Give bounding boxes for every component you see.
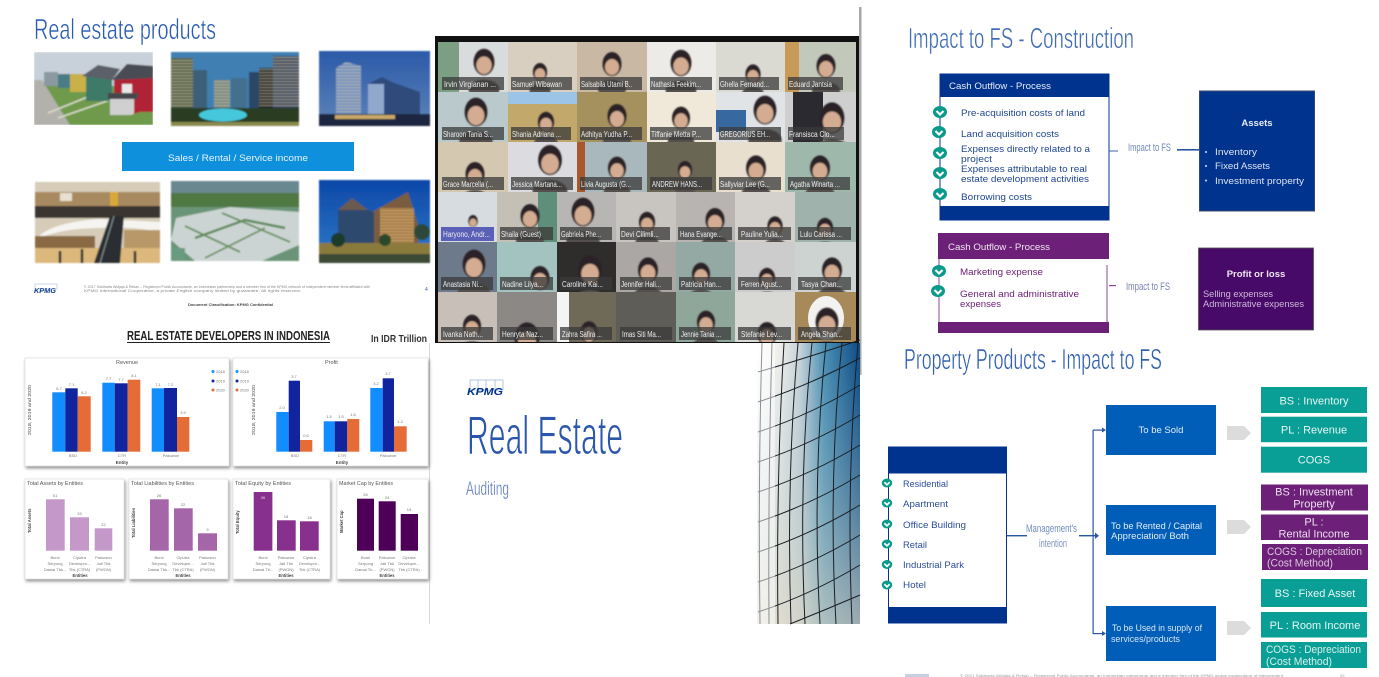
chart: market cap by entities: 26 — [363, 492, 368, 497]
chart: total liabilities by entities: Developm... — [172, 561, 194, 566]
chart: total liabilities by entities: 9 — [206, 527, 209, 532]
results: used: BS : Fixed Asset — [1275, 588, 1355, 600]
chart: total liabilities by entities: Pakuwon — [199, 555, 216, 560]
tile backgrounds row 6 — [438, 292, 856, 342]
arrow: used result — [1227, 621, 1251, 635]
chart: market cap by entities: 19 — [407, 507, 412, 512]
chart: profit: Entity — [336, 460, 349, 465]
box: assets — [1200, 91, 1314, 211]
chart: total equity by entities: Pakuwon — [278, 555, 294, 560]
card: property types list — [882, 447, 1007, 623]
participant names: Nathasia Feekim... — [651, 80, 701, 89]
chart: total equity by entities: Entities — [278, 573, 294, 578]
participant names: ANDREW HANS... — [652, 180, 702, 189]
chart: total assets by entities: 51 — [53, 493, 58, 498]
participant names: Angela Shan... — [801, 330, 842, 339]
card: cash outflow process blue: Expenses directly related to a — [961, 144, 1091, 155]
chart: revenue: 2018 — [216, 369, 226, 374]
participant names: Hana Evange... — [680, 230, 722, 239]
results: used: COGS : Depreciation — [1266, 644, 1361, 656]
chart: revenue: 7.7 — [118, 377, 125, 382]
chart: revenue: 6.2 — [81, 390, 88, 395]
box: to be rented: To be Rented / Capital — [1111, 521, 1202, 532]
participant names: Fransisca Clo... — [789, 130, 835, 139]
participant names: Nadine Lilya... — [502, 280, 543, 289]
results: rented: PL : — [1304, 516, 1324, 528]
participant names: Agatha Winarta ... — [790, 180, 840, 189]
box: assets: Investment property — [1215, 176, 1304, 187]
panel: real estate products slide — [34, 14, 430, 307]
chart: total assets by entities: Pakuwon — [95, 555, 112, 560]
participant names: Stefanie Lev... — [741, 330, 782, 339]
card: cash outflow process purple: expenses — [960, 299, 1001, 310]
chart: revenue: 7.1 — [155, 382, 162, 387]
photo: residential houses — [34, 52, 153, 125]
chart: profit: 1.5 — [326, 414, 333, 419]
results: sold: PL : Revenue — [1281, 424, 1347, 436]
chart: total equity by entities: Tbk (CTRA) — [299, 567, 321, 572]
participant names: Jennie Tania ... — [681, 330, 721, 339]
results: used: PL : Room Income — [1270, 620, 1360, 632]
tile backgrounds row 2 — [438, 92, 856, 142]
chart: total liabilities by entities: Damai Tbk... — [148, 567, 170, 572]
chart: market cap by entities: 24 — [385, 495, 390, 500]
card: cash outflow process blue: Land acquisition costs — [961, 129, 1059, 140]
card: property types list: Retail — [903, 540, 927, 551]
chart: total assets by entities: Serpong — [47, 561, 63, 566]
photo: retail mall — [35, 182, 160, 263]
banner: sales rental service income — [122, 142, 354, 171]
photo: industrial park — [171, 181, 299, 261]
box: profit or loss: Selling expenses — [1203, 289, 1273, 300]
participant names: Pauline Yulia... — [741, 230, 783, 239]
tile backgrounds row 5 — [438, 242, 856, 292]
chart: total assets by entities: 33 — [77, 511, 82, 516]
photo: apartment towers — [171, 52, 299, 126]
participant names: Haryono, Andr... — [443, 230, 490, 239]
participant heads row 5 — [457, 248, 846, 292]
chart: profit — [233, 358, 428, 466]
chart: total equity by entities: Ciputra — [303, 555, 317, 560]
results: sold: BS : Inventory — [1279, 396, 1349, 408]
participant names: Ferren Agust... — [741, 280, 782, 289]
results: sold: COGS — [1298, 454, 1330, 466]
chart: revenue: 2018, 2019 and 2020 — [27, 384, 32, 435]
panel: KPMG real estate cover slide — [466, 340, 860, 624]
chart: total liabilities by entities: 26 — [157, 493, 162, 498]
participant names: Sharoon Tania S... — [443, 130, 493, 139]
box: to be sold: To be Sold — [1139, 425, 1183, 436]
results: rented: COGS : Depreciation — [1267, 546, 1362, 558]
chart: revenue: 8.1 — [131, 373, 138, 378]
card: cash outflow process blue: Pre-acquisition costs of land — [961, 108, 1085, 119]
label: management's intention: Management's — [1026, 523, 1077, 535]
chart: market cap by entities: Market Cap by Entities — [339, 481, 393, 487]
photo: office buildings — [319, 51, 430, 126]
card: cash outflow process blue: estate development activities — [961, 174, 1089, 185]
panel: video call participant grid — [435, 36, 859, 343]
participant names: Ghella Fernand... — [720, 80, 769, 89]
chart: total equity by entities: 18 — [307, 515, 312, 520]
chart: total assets by entities: 22 — [101, 522, 106, 527]
title: real estate: Real Estate — [467, 404, 623, 466]
chart: total equity by entities: Total Equity by Entities — [235, 481, 291, 487]
chart: total liabilities by entities: Ciputra — [177, 555, 190, 560]
chart: total liabilities by entities: Entities — [175, 573, 191, 578]
results: rented — [1261, 484, 1368, 570]
card: cash outflow process blue: project — [961, 154, 992, 165]
box: profit or loss — [1198, 248, 1314, 330]
participant names: Shania Adriana ... — [512, 130, 561, 139]
participant names: Shaila (Guest) — [501, 230, 541, 239]
chart: profit: 3.2 — [373, 381, 380, 386]
results: rented: Property — [1293, 498, 1335, 510]
participant names: Jessica Martana... — [512, 180, 562, 189]
chart: revenue: Pakuwon — [163, 453, 179, 458]
chart: revenue: BSD — [69, 453, 77, 458]
chart: total liabilities by entities — [129, 479, 228, 579]
box: to be rented — [1106, 505, 1216, 555]
chart: profit: 1.6 — [350, 412, 357, 417]
tile backgrounds row 1 — [438, 42, 856, 92]
unit note: In IDR Trillion — [371, 333, 427, 345]
box: to be rented: Appreciation/ Both — [1111, 531, 1189, 542]
chart: total liabilities by entities: Total Liabilities — [131, 507, 136, 538]
label: management's intention — [1007, 523, 1077, 550]
box: assets: Fixed Assets — [1215, 161, 1270, 172]
chart: total equity by entities: Total Equity — [235, 510, 240, 534]
footer: KPMG logo and legal text: © 2017 Siddharta Widjaja & Rekan – Registered Public Accountants, an Indonesian partnership and a member firm of the KPMG network of independent member firms affiliated with — [84, 285, 370, 289]
chart: total assets by entities: Jati Tbk — [97, 561, 110, 566]
title: property products impact to FS: Property Products - Impact to FS — [904, 344, 1162, 376]
tile backgrounds row 3 — [438, 142, 856, 192]
box: to be used: To be Used in supply of — [1112, 623, 1202, 634]
chart: total liabilities by entities: Jati Tbk — [201, 561, 214, 566]
chart: total equity by entities: Developm... — [299, 561, 320, 566]
chart: profit: 2018, 2019 and 2020 — [251, 384, 256, 435]
chart: profit: 3.7 — [385, 371, 392, 376]
chart: revenue: CTR — [118, 453, 126, 458]
box: to be sold — [1106, 405, 1216, 455]
card: property types list: Industrial Park — [903, 560, 964, 571]
box: profit or loss: Administrative expenses — [1203, 299, 1304, 310]
chart: market cap by entities: Entities — [379, 573, 395, 578]
participant heads row 1 — [468, 48, 841, 92]
chart: revenue: 7.2 — [168, 382, 174, 387]
chart: revenue: Revenue — [116, 360, 138, 366]
card: cash outflow process purple: General and administrative — [960, 289, 1079, 300]
photo: glass building facade — [757, 340, 860, 624]
box: to be used: services/products — [1111, 634, 1180, 645]
chart: total equity by entities: 18 — [284, 514, 289, 519]
participant names: Gabriela Phe... — [561, 230, 601, 239]
results: rented: BS : Investment — [1275, 486, 1353, 498]
chart: market cap by entities — [337, 479, 428, 579]
footer: legal text — [905, 673, 1345, 677]
participant heads row 3 — [464, 144, 836, 192]
chart: market cap by entities: Market Cap — [339, 510, 344, 533]
chart: total equity by entities — [233, 479, 330, 579]
chart: market cap by entities: Serpong — [358, 561, 373, 566]
chart: market cap by entities: Ciputra — [403, 555, 416, 560]
chart: market cap by entities: (PWON) — [379, 567, 395, 572]
chart: total liabilities by entities: 22 — [181, 502, 186, 507]
panel: property products impact to FS — [882, 344, 1368, 677]
chart: total assets by entities: Ciputra — [73, 555, 87, 560]
chart: profit: 2.0 — [279, 405, 286, 410]
results: rented: Rental Income — [1279, 528, 1349, 540]
chart: market cap by entities: Developm... — [398, 561, 420, 566]
participant names: Ivanka Nath... — [443, 330, 483, 339]
card: property types list: Apartment — [903, 499, 948, 510]
title: real estate products: Real estate products — [34, 14, 216, 46]
results: used: (Cost Method) — [1266, 656, 1332, 668]
chart: total liabilities by entities: (PWON) — [200, 567, 216, 572]
participant names: Jennifer Hali... — [621, 280, 661, 289]
highlighted speaker label — [441, 227, 494, 241]
participant names: Tasya Chan... — [801, 280, 842, 289]
chart: profit: 3.7 — [291, 374, 298, 379]
footer: KPMG logo and legal text: KPMG International Cooperative, a private English company limited by guarantee. All rights reserved. — [84, 289, 301, 293]
card: cash outflow process blue — [932, 74, 1109, 220]
arrow: impact to FS assets — [1109, 142, 1200, 154]
chart: total liabilities by entities: Serpong — [151, 561, 167, 566]
chart: revenue: 7.7 — [106, 376, 112, 381]
participant names: Caroline Kai... — [562, 280, 603, 289]
participant names: Eduard Jantsia — [789, 80, 832, 89]
chart: revenue: 2020 — [216, 388, 226, 392]
participant heads row 4 — [467, 196, 834, 242]
footer: KPMG logo and legal text: KPMG — [34, 288, 57, 295]
participant names: Devi Cilimli... — [621, 230, 659, 239]
participant heads row 6 — [462, 306, 840, 342]
panel: impact to FS construction — [908, 23, 1314, 333]
results: sold — [1261, 387, 1367, 473]
chart: profit: 0.6 — [303, 433, 310, 438]
arrow: rented result — [1227, 520, 1251, 534]
chart: market cap by entities: Jati Tbk — [380, 561, 394, 566]
chart: total equity by entities: Jati Tbk — [279, 561, 293, 566]
participant names: Patricia Han... — [681, 280, 721, 289]
card: cash outflow process purple — [931, 233, 1109, 333]
box: assets: Assets — [1241, 118, 1273, 129]
chart: total equity by entities: Bumi — [258, 555, 268, 560]
chart: total assets by entities: Total Assets — [27, 508, 32, 533]
chart: revenue — [25, 358, 229, 466]
box: to be used — [1106, 606, 1216, 661]
chart: profit: Pakuwon — [380, 453, 396, 458]
heading: real estate developers in indonesia: REAL ESTATE DEVELOPERS IN INDONESIA — [127, 328, 330, 343]
participant names: Livia Augusta (G... — [581, 180, 631, 189]
chart: profit: Profit — [325, 360, 338, 366]
card: cash outflow process blue: Borrowing costs — [961, 192, 1032, 203]
participant names: GREGORIUS EH... — [720, 130, 770, 139]
card: property types list: Hotel — [903, 580, 926, 591]
logo: KPMG — [467, 380, 503, 398]
chart: profit: 1.5 — [338, 414, 345, 419]
card: property types list: Residential — [903, 479, 948, 490]
footer: KPMG logo and legal text: 4 — [425, 287, 428, 293]
results: rented: (Cost Method) — [1267, 558, 1333, 570]
chart: total assets by entities: Damai Tbk... — [44, 567, 66, 572]
arrow: sold result — [1227, 426, 1251, 440]
chart: total equity by entities: Serpong — [255, 561, 271, 566]
chart: revenue: Entity — [116, 460, 129, 465]
box: assets: Inventory — [1215, 147, 1257, 158]
chart: revenue: 7.1 — [69, 382, 75, 387]
divider line — [859, 7, 862, 375]
participant names: Tiffanie Metta P... — [651, 130, 701, 139]
arrows: branch connectors — [1079, 428, 1106, 636]
chart: revenue: 2019 — [216, 378, 226, 384]
chart: total equity by entities: (PWON) — [278, 567, 294, 572]
banner: sales rental service income: Sales / Rental / Service income — [168, 153, 308, 164]
chart: profit: BSD — [291, 453, 299, 458]
logo: KPMG: KPMG — [467, 386, 503, 398]
chart: profit: 2020 — [240, 388, 250, 392]
participant names — [443, 80, 842, 339]
subtitle: auditing: Auditing — [466, 479, 509, 500]
chart: total assets by entities — [25, 479, 124, 579]
participant names: Grace Marcella (... — [443, 180, 493, 189]
chart: revenue: 3.9 — [180, 410, 187, 415]
chart: market cap by entities: Pakuwon — [379, 555, 395, 560]
participant names: Anastasia Ni... — [443, 280, 483, 289]
card: cash outflow process purple: Cash Outflow - Process — [948, 242, 1050, 253]
results: used — [1261, 579, 1367, 668]
chart: market cap by entities: Tbk (CTRA) — [398, 567, 420, 572]
chart: profit: 2018 — [240, 369, 250, 374]
title: impact to FS construction: Impact to FS - Construction — [908, 23, 1134, 55]
chart: market cap by entities: Bumi — [361, 555, 370, 560]
chart: total liabilities by entities: Bumi — [154, 555, 164, 560]
chart: market cap by entities: Damai Tb... — [355, 567, 376, 572]
participant names: Zahra Safira ... — [562, 330, 602, 339]
panel: bar chart dashboard real estate developers — [25, 328, 430, 624]
footer: KPMG logo and legal text — [34, 284, 428, 307]
chart: profit: 2019 — [240, 378, 250, 384]
chart: profit: CTR — [338, 453, 346, 458]
chart: total assets by entities: Tbk (CTRA) — [69, 567, 91, 572]
participant names: Samuel Wibawan — [512, 80, 562, 89]
box: profit or loss: Profit or loss — [1227, 269, 1285, 280]
chart: total assets by entities: Developm... — [69, 561, 90, 566]
photo: hotel — [319, 180, 430, 263]
participant names: Adhitya Yudha P... — [581, 130, 632, 139]
footer: KPMG logo and legal text: Document Classification: KPMG Confidential — [188, 303, 273, 307]
chart: total assets by entities: Total Assets by Entities — [27, 481, 83, 487]
label: management's intention: intention — [1039, 538, 1067, 550]
name labels — [441, 77, 851, 340]
chart: total equity by entities: 36 — [261, 495, 266, 500]
chart: total assets by entities: (PWON) — [96, 567, 112, 572]
card: cash outflow process blue: Cash Outflow - Process — [949, 81, 1051, 92]
arrow: impact to FS profit or loss — [1109, 281, 1170, 293]
participant names: Henryta Naz... — [502, 330, 543, 339]
card: property types list: Office Building — [903, 520, 966, 531]
chart: profit: 1.3 — [397, 419, 404, 424]
arrow: impact to FS assets: Impact to FS — [1128, 142, 1171, 154]
participant heads row 2 — [458, 94, 846, 142]
card: cash outflow process purple: Marketing expense — [960, 267, 1043, 278]
chart: revenue: 6.7 — [56, 386, 63, 391]
chart: total assets by entities: Entities — [72, 573, 88, 578]
participant names: Irvin Virgianan ... — [444, 80, 496, 89]
chart: total assets by entities: Bumi — [50, 555, 60, 560]
participant names: Imas Siti Ma... — [622, 330, 661, 339]
participant names: Salsabila Utami B.. — [581, 80, 632, 89]
participant names: Lulu Carissa ... — [800, 230, 842, 239]
chart: total liabilities by entities: Tbk (CTRA) — [172, 567, 194, 572]
chart: total liabilities by entities: Total Liabilities by Entities — [131, 481, 194, 487]
card: cash outflow process blue: Expenses attributable to real — [961, 164, 1087, 175]
participant names: Sallyviar Lee (G... — [720, 180, 770, 189]
tile backgrounds row 4 — [438, 192, 856, 242]
arrow: impact to FS profit or loss: Impact to FS — [1126, 281, 1170, 293]
chart: total equity by entities: Damai Tb... — [253, 567, 273, 572]
